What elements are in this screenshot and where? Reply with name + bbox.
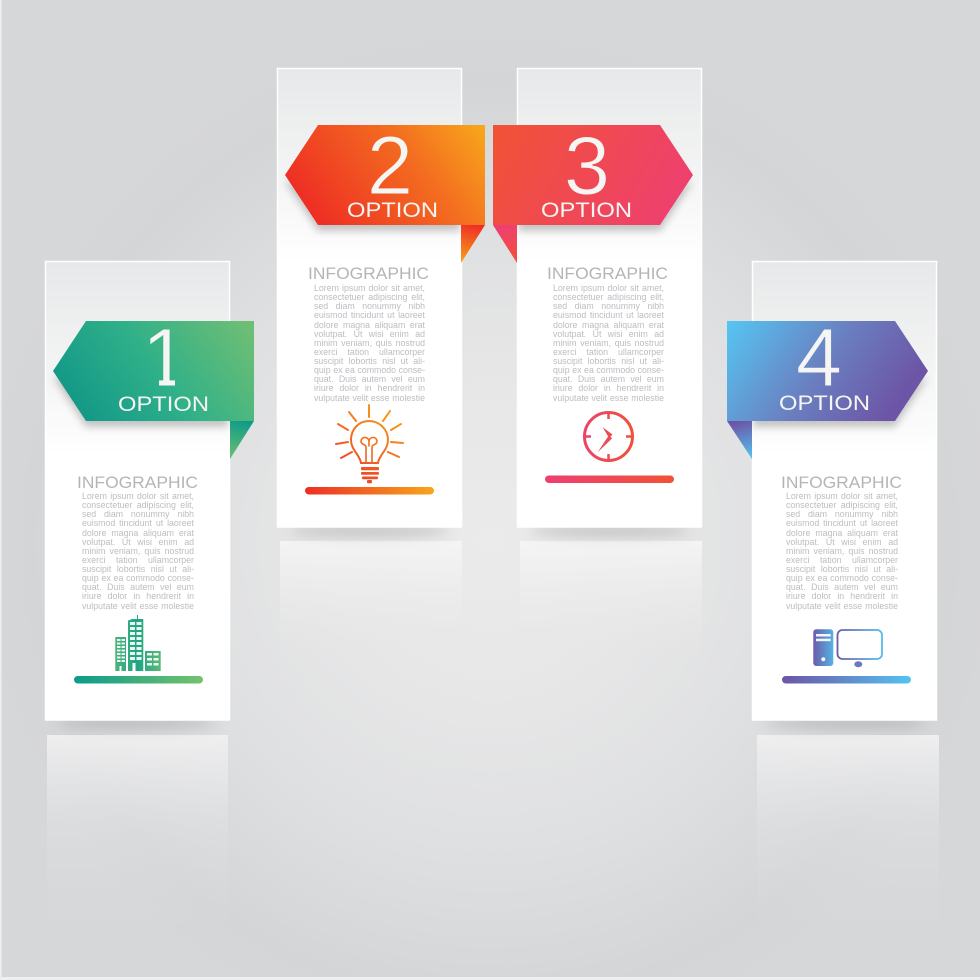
number 1: 1 (142, 311, 188, 404)
text block: euismod tincidunt ut laoreet (553, 310, 664, 320)
text block: suscipit lobortis nisl ut ali- (786, 564, 898, 574)
text block: euismod tincidunt ut laoreet (314, 310, 425, 320)
number 2: 2 (367, 119, 413, 212)
text block: quat. Duis autem vel eum (82, 582, 194, 592)
text block: quip ex ea commodo conse- (82, 573, 194, 583)
text block: exerci tation ullamcorper (553, 347, 664, 357)
text block: quip ex ea commodo conse- (553, 365, 664, 375)
icon: buildings (115, 615, 161, 671)
text block: suscipit lobortis nisl ut ali- (553, 356, 664, 366)
heading: INFOGRAPHIC (308, 264, 429, 283)
panel: option 4 (727, 262, 936, 729)
text block: quip ex ea commodo conse- (786, 573, 898, 583)
text block: iriure dolor in hendrerit in (82, 591, 194, 601)
label: option: OPTION (779, 391, 870, 415)
text block: euismod tincidunt ut laoreet (82, 518, 194, 528)
text block: euismod tincidunt ut laoreet (786, 518, 898, 528)
heading: INFOGRAPHIC (547, 264, 668, 283)
text block: suscipit lobortis nisl ut ali- (82, 564, 194, 574)
text block: quat. Duis autem vel eum (786, 582, 898, 592)
icon: light bulb (336, 405, 403, 483)
text block (82, 492, 194, 614)
progress bar (305, 487, 434, 494)
label: option: OPTION (118, 392, 209, 416)
progress bar (74, 676, 203, 684)
reflection: card 4 (757, 735, 939, 923)
ribbon: option 3 (493, 119, 693, 263)
text block: iriure dolor in hendrerit in (314, 383, 425, 393)
text block (314, 284, 425, 406)
text block: vulputate velit esse molestie (82, 600, 194, 610)
text block: quat. Duis autem vel eum (553, 374, 664, 384)
text block: minim veniam, quis nostrud (314, 338, 425, 348)
text block: consectetuer adipiscing elit, (786, 500, 898, 510)
reflection: card 1 (47, 735, 228, 923)
text block: minim veniam, quis nostrud (82, 546, 194, 556)
ribbon: option 4 (727, 311, 928, 459)
reflection: card 3 (520, 541, 702, 659)
text block: minim veniam, quis nostrud (553, 338, 664, 348)
text block: quat. Duis autem vel eum (314, 374, 425, 384)
text block: volutpat. Ut wisi enim ad (786, 537, 898, 547)
text block: exerci tation ullamcorper (786, 555, 898, 565)
text block: volutpat. Ut wisi enim ad (553, 329, 664, 339)
progress bar (782, 676, 911, 684)
panel: option 2 (278, 68, 485, 537)
number 4: 4 (796, 311, 842, 404)
label: option: OPTION (541, 198, 632, 222)
number 3: 3 (564, 119, 610, 212)
text block: iriure dolor in hendrerit in (553, 383, 664, 393)
text block: consectetuer adipiscing elit, (314, 292, 425, 302)
text block: sed diam nonummy nibh (553, 301, 664, 311)
text block: sed diam nonummy nibh (314, 301, 425, 311)
text block: exerci tation ullamcorper (82, 555, 194, 565)
text block (786, 492, 898, 614)
text block: iriure dolor in hendrerit in (786, 591, 898, 601)
reflection: card 2 (280, 541, 462, 659)
text block: consectetuer adipiscing elit, (553, 292, 664, 302)
text block: volutpat. Ut wisi enim ad (82, 537, 194, 547)
text block: dolore magna aliquam erat (82, 528, 194, 538)
text block: dolore magna aliquam erat (786, 528, 898, 538)
progress bar (545, 476, 674, 483)
icon: desktop computer (813, 629, 882, 667)
text block: vulputate velit esse molestie (314, 392, 425, 402)
text block: consectetuer adipiscing elit, (82, 500, 194, 510)
ribbon: option 2 (285, 119, 485, 263)
text block: sed diam nonummy nibh (786, 509, 898, 519)
label: option: OPTION (347, 198, 438, 222)
text block: sed diam nonummy nibh (82, 509, 194, 519)
text block: volutpat. Ut wisi enim ad (314, 329, 425, 339)
icon: clock (584, 412, 633, 461)
text block: vulputate velit esse molestie (786, 600, 898, 610)
text block: exerci tation ullamcorper (314, 347, 425, 357)
ribbon: option 1 (53, 311, 254, 459)
text block: dolore magna aliquam erat (314, 320, 425, 330)
text block: suscipit lobortis nisl ut ali- (314, 356, 425, 366)
heading: INFOGRAPHIC (77, 473, 198, 492)
text block: vulputate velit esse molestie (553, 392, 664, 402)
text block: minim veniam, quis nostrud (786, 546, 898, 556)
heading: INFOGRAPHIC (781, 473, 902, 492)
panel: option 1 (46, 262, 254, 729)
text block (553, 284, 664, 406)
text block: dolore magna aliquam erat (553, 320, 664, 330)
text block: quip ex ea commodo conse- (314, 365, 425, 375)
panel: option 3 (493, 68, 702, 537)
